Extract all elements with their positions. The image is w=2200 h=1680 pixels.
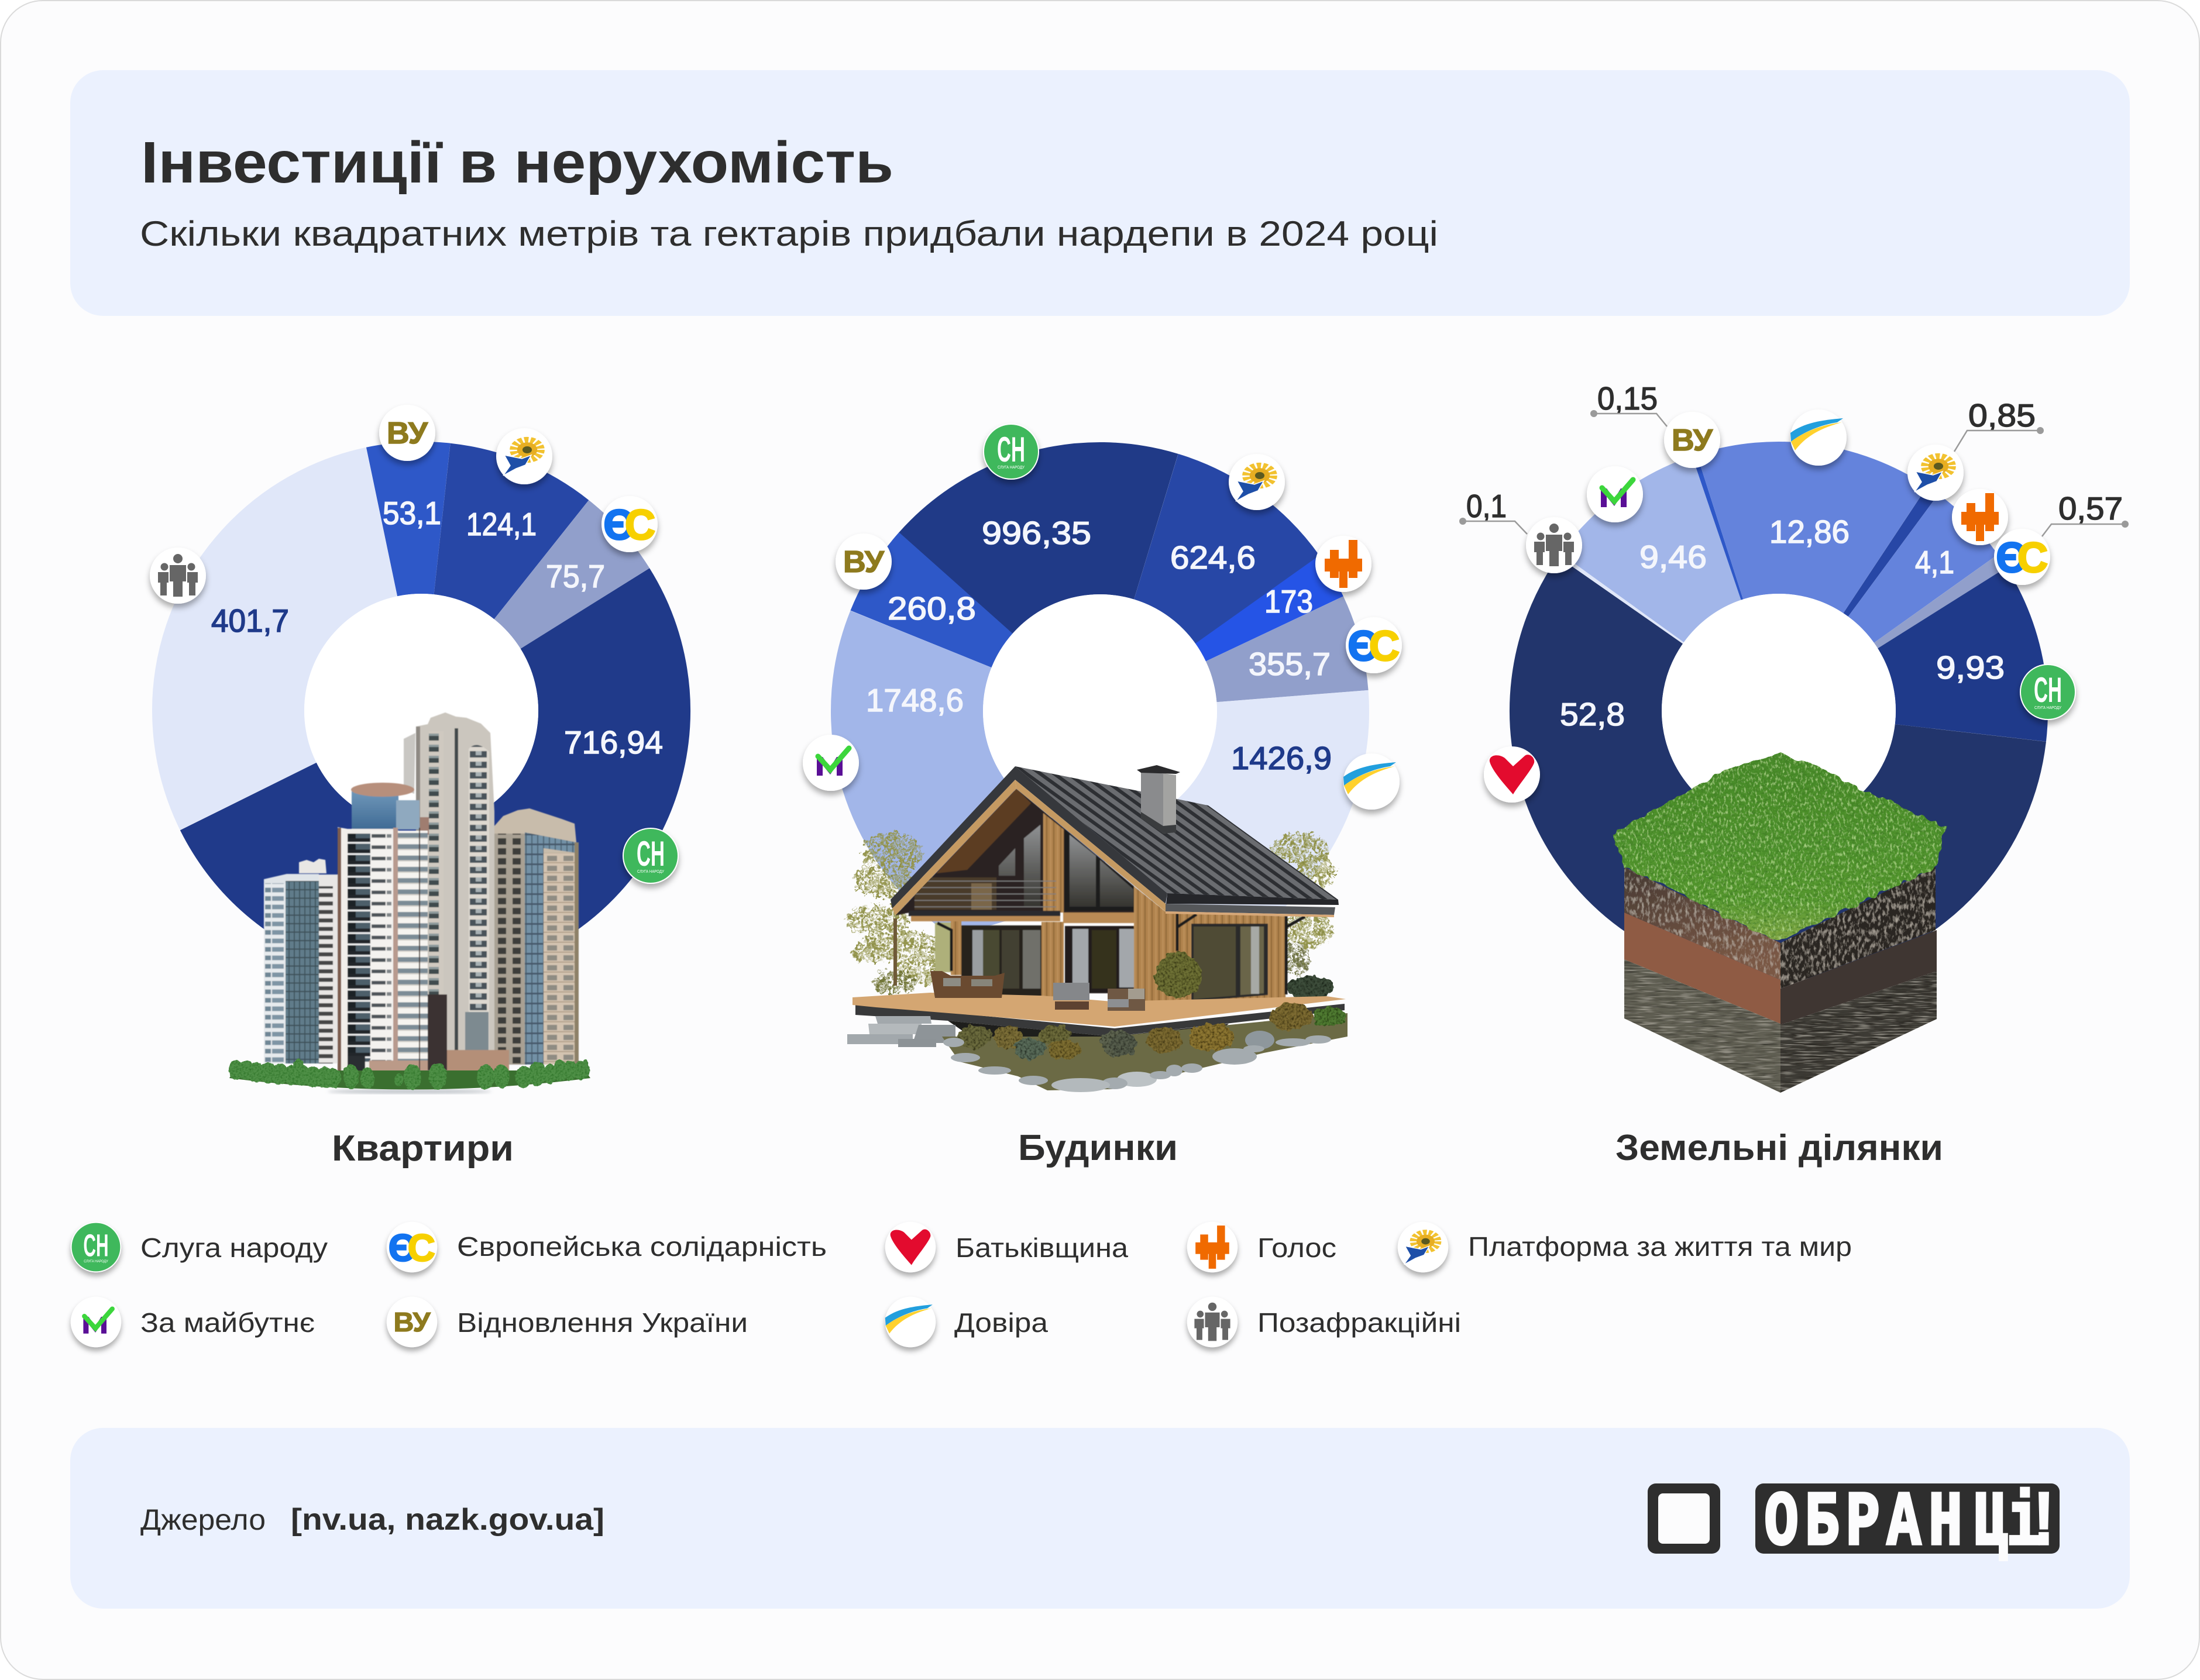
icon: Довіра [1343, 753, 1400, 810]
ground floor left glazing [961, 925, 1041, 997]
callout: 0,1 [1459, 488, 1527, 534]
balcony [909, 876, 1060, 921]
value labels: houses: 173 [1264, 583, 1313, 619]
value labels: houses: 355,7 [1249, 646, 1331, 682]
panel: apartments donut [150, 405, 693, 1169]
legend item: Голос: Голос [1257, 1233, 1336, 1263]
icon: Слуга народу [623, 828, 679, 884]
upper glass left [999, 825, 1040, 907]
icon: Слуга народу: СЛУГА НАРОДУ [998, 466, 1025, 470]
icon: Європейська солідарність: С [2017, 535, 2048, 581]
dark shrub right [1287, 976, 1334, 999]
icon: Позафракційні [150, 548, 206, 604]
callout: 0,57: 0,57 [2058, 490, 2123, 526]
legend item: Відновлення України: Відновлення України [457, 1307, 748, 1338]
subtitle: Скільки квадратних метрів та гектарів придбали нардепи в 2024 році [140, 214, 1438, 253]
icon: Відновлення України [379, 405, 435, 461]
value labels: houses: 996,35 [982, 515, 1091, 551]
icon: Відновлення України [1664, 412, 1720, 468]
timber column upper [1043, 813, 1064, 913]
callout: 0,85 [1954, 397, 2044, 452]
donut chart: apartments [150, 439, 693, 982]
legend item: Позафракційні [1187, 1297, 1461, 1347]
garden stones [943, 1031, 1331, 1092]
legend item: Слуга народу [71, 1222, 328, 1272]
legend item: Батьківщина: Батьківщина [955, 1233, 1128, 1263]
left tree [846, 832, 948, 994]
illustration: apartment buildings [229, 712, 590, 1094]
icon: Європейська солідарність [1994, 529, 2050, 585]
deck [852, 993, 1346, 1053]
icon: Позафракційні [1526, 517, 1582, 573]
ground and bushes [229, 1059, 590, 1094]
legend item: Довіра: Довіра [954, 1307, 1048, 1338]
icon: Платформа за життя та мир [1907, 445, 1964, 501]
grass top [1612, 753, 1945, 942]
callout: 0,1: 0,1 [1466, 488, 1507, 524]
legend item: Платформа за життя та мир: Платформа за життя та мир [1468, 1231, 1852, 1262]
source text: [nv.ua, nazk.gov.ua] [291, 1503, 604, 1537]
upper right window [1065, 829, 1134, 911]
planter [1154, 953, 1201, 1009]
icon: Європейська солідарність [601, 496, 658, 552]
icon: Голос [1315, 536, 1371, 592]
footer panel [70, 1428, 2130, 1609]
value labels: houses [866, 515, 1332, 776]
icon: Відновлення України: ВУ [1672, 424, 1713, 457]
ground floor right glazing [1065, 926, 1134, 993]
icon: Європейська солідарність: Є [1996, 535, 2026, 581]
value labels: apartments: 53,1 [383, 495, 441, 531]
source text [140, 1503, 604, 1537]
value labels: houses: 1748,6 [866, 682, 964, 718]
legend item: Позафракційні: Позафракційні [1257, 1307, 1461, 1338]
legend item: Європейська солідарність: С [408, 1226, 435, 1269]
panel: houses donut [803, 424, 1402, 1168]
white plot behind the house [878, 889, 1346, 1088]
shrubs [959, 1003, 1346, 1059]
right tree [1271, 833, 1335, 976]
value labels: houses: 260,8 [888, 590, 976, 626]
icon: Слуга народу: СЛУГА НАРОДУ [637, 870, 664, 874]
value labels: apartments: 75,7 [546, 558, 605, 594]
middle timber band [1063, 913, 1134, 923]
legend item: Слуга народу: СН [83, 1228, 109, 1263]
garden ground [942, 1013, 1348, 1090]
icon: Європейська солідарність: Є [603, 502, 634, 549]
illustration: soil cube [1612, 753, 1945, 1093]
header panel [70, 70, 2130, 316]
value labels: houses: 1426,9 [1231, 740, 1332, 776]
right soil face [1780, 867, 1937, 1093]
gable dark back [895, 789, 1134, 915]
right tower [494, 808, 579, 1065]
left soil face [1624, 867, 1780, 1093]
icon: За майбутнє [803, 735, 859, 791]
tall tower [404, 712, 494, 1070]
lobby [447, 1050, 509, 1085]
chart title: houses: Будинки [1018, 1128, 1178, 1168]
value labels: land plots: 9,93 [1936, 649, 2005, 686]
legend item: Батьківщина [885, 1222, 1128, 1272]
sliding door [1191, 924, 1268, 1001]
value labels: land plots: 52,8 [1560, 696, 1625, 732]
value labels: land plots: 4,1 [1915, 544, 1954, 580]
curved tower [338, 783, 429, 1086]
ground floor wall strip [951, 921, 961, 975]
title: Інвестиції в нерухомість [141, 130, 893, 195]
value labels: land plots: 12,86 [1769, 514, 1850, 550]
legend [71, 1222, 1852, 1347]
legend item: Відновлення України [387, 1297, 748, 1347]
icon: Європейська солідарність: С [1369, 623, 1400, 670]
left tower [264, 859, 338, 1063]
icon: Слуга народу: СН [637, 834, 665, 873]
icon: Слуга народу [2020, 664, 2076, 720]
value labels: houses: 624,6 [1170, 539, 1256, 576]
value labels: apartments: 716,94 [564, 724, 663, 760]
legend item: Слуга народу: Слуга народу [140, 1233, 328, 1263]
tree through ground-floor gap [935, 922, 951, 972]
icon: Слуга народу: СН [997, 430, 1025, 469]
legend item: За майбутнє [71, 1297, 315, 1347]
tree trunk [893, 918, 897, 986]
terrace furniture [930, 971, 1145, 1011]
roof [891, 766, 1339, 917]
timber column lower [1041, 922, 1064, 997]
legend item: Слуга народу: СЛУГА НАРОДУ [84, 1259, 109, 1264]
value labels: land plots [1560, 514, 2005, 732]
value labels: apartments: 401,7 [211, 603, 289, 639]
icon: Платформа за життя та мир [496, 428, 552, 484]
legend item: Платформа за життя та мир [1398, 1222, 1852, 1272]
icon: Європейська солідарність [1346, 617, 1402, 673]
icon: Європейська солідарність: С [625, 502, 655, 549]
icon: За майбутнє [1587, 466, 1643, 522]
icon: Слуга народу: СН [2034, 670, 2062, 710]
right timber wall [1134, 886, 1285, 1001]
downpipes [937, 913, 1305, 994]
donut chart: houses [827, 439, 1373, 984]
stone steps [847, 1016, 955, 1047]
icon: Слуга народу [983, 424, 1039, 480]
value labels: land plots: 9,46 [1639, 539, 1707, 575]
legend item: Європейська солідарність: Є [389, 1226, 415, 1269]
icon: Відновлення України: ВУ [843, 545, 885, 579]
illustration: house [846, 765, 1348, 1092]
legend item: Голос [1187, 1222, 1336, 1272]
icon: Батьківщина [1484, 746, 1540, 803]
value labels: apartments [211, 495, 663, 760]
icon: Довіра [1790, 409, 1847, 466]
donut chart: land plots [1509, 441, 2048, 980]
legend item: За майбутнє: За майбутнє [140, 1307, 315, 1338]
chimney [1137, 765, 1180, 834]
source text: Джерело [140, 1503, 266, 1536]
icon: Відновлення України: ВУ [387, 416, 428, 450]
legend item: Європейська солідарність: Європейська солідарність [457, 1231, 827, 1262]
callout: 0,85: 0,85 [1968, 397, 2036, 433]
legend item: Відновлення України: ВУ [393, 1307, 431, 1337]
icon: Європейська солідарність: Є [1348, 623, 1378, 670]
icon: Голос [1952, 489, 2008, 545]
chart title: land plots: Земельні ділянки [1615, 1128, 1943, 1168]
legend item: Довіра [885, 1297, 1048, 1347]
callout: 0,15: 0,15 [1597, 380, 1658, 416]
callout: 0,57 [2042, 490, 2129, 536]
logo mark [1648, 1483, 1720, 1554]
soffit [936, 789, 1031, 873]
chart title: apartments: Квартири [332, 1128, 514, 1169]
logo wordmark: ОБРАНЦі! [1765, 1481, 2061, 1567]
value labels: apartments: 124,1 [466, 506, 537, 542]
icon: Платформа за життя та мир [1229, 454, 1285, 510]
panel: land plots donut [1459, 380, 2129, 1168]
legend item: Європейська солідарність [387, 1222, 827, 1272]
callout: 0,15 [1590, 380, 1667, 426]
icon: Слуга народу: СЛУГА НАРОДУ [2034, 706, 2061, 710]
icon: Відновлення України [836, 533, 892, 590]
